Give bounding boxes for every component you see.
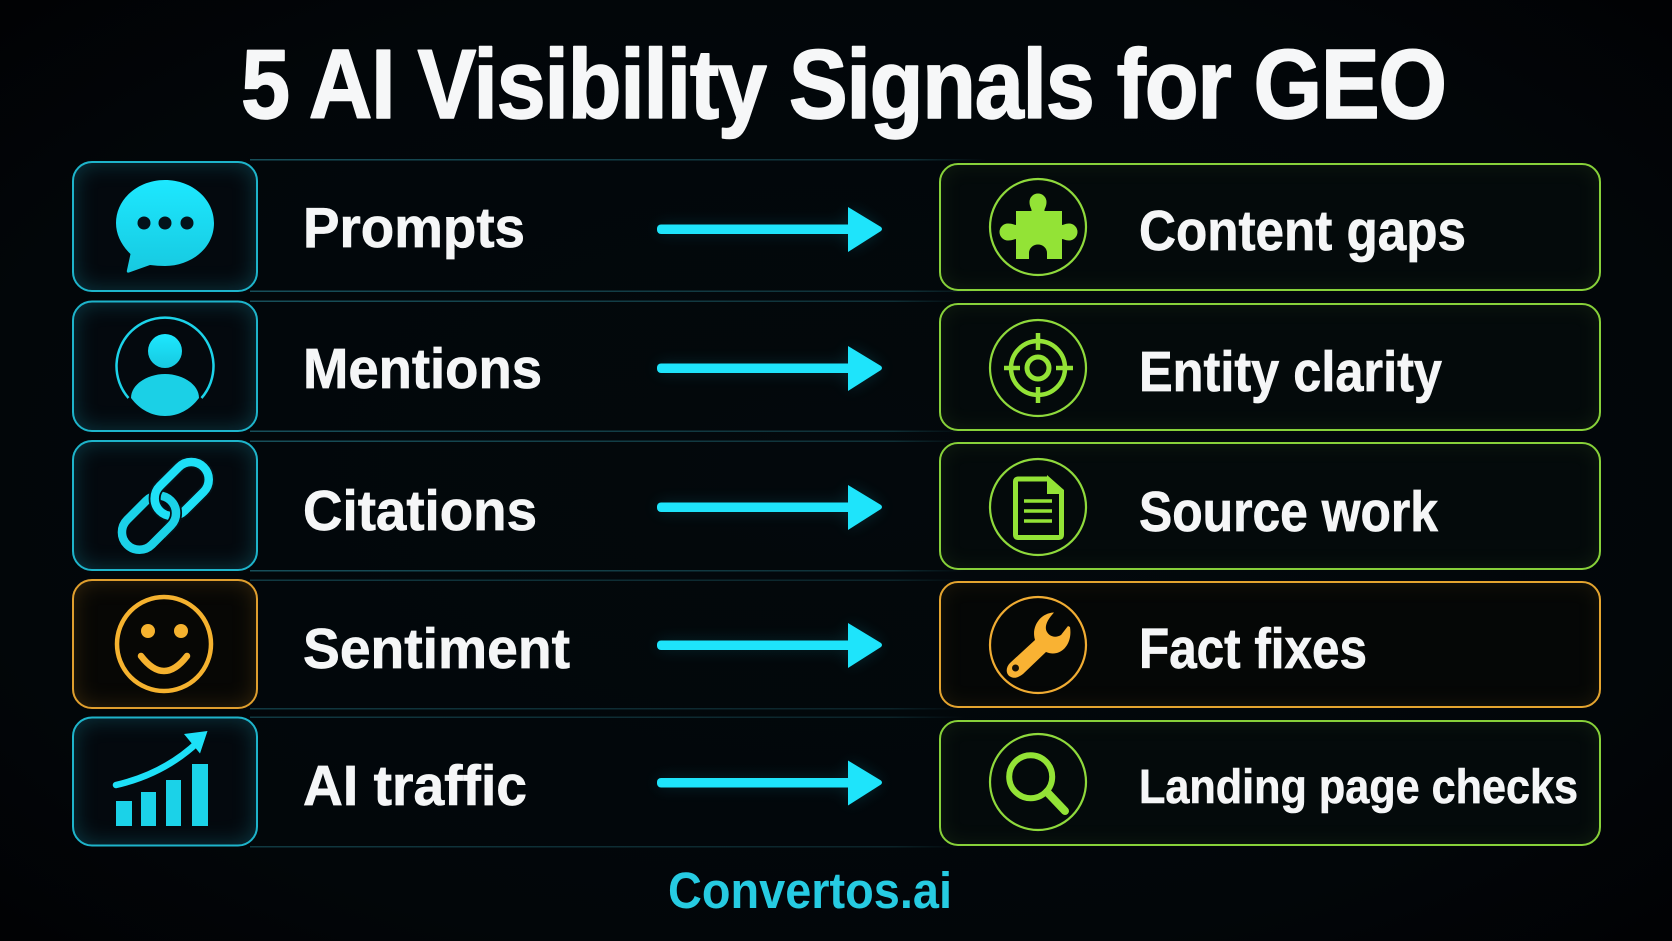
signal label: Citations: Citations bbox=[303, 479, 537, 543]
panel: Entity clarity action card bbox=[940, 304, 1600, 430]
panel: Sentiment signal card bbox=[73, 580, 257, 708]
panel: Source work action card bbox=[940, 443, 1600, 569]
action label: Landing page checks: Landing page checks bbox=[1139, 761, 1578, 814]
icon: speech bubble bbox=[116, 180, 214, 273]
icon: puzzle piece bbox=[990, 179, 1086, 275]
panel: row 4 background strip bbox=[250, 580, 965, 710]
panel: row 3 background strip bbox=[250, 440, 965, 572]
action label: Entity clarity: Entity clarity bbox=[1139, 340, 1442, 404]
arrow: Citations to Source work bbox=[657, 485, 882, 530]
panel: row 5 background strip bbox=[250, 716, 965, 848]
arrow: Prompts to Content gaps bbox=[657, 207, 882, 252]
icon: wrench bbox=[990, 597, 1086, 693]
arrow: AI traffic to Landing page checks bbox=[657, 760, 882, 806]
icon: target crosshair bbox=[990, 320, 1086, 416]
signal label: Prompts: Prompts bbox=[303, 196, 525, 260]
icon: smiley face bbox=[117, 597, 211, 691]
panel: Citations signal card bbox=[73, 441, 257, 570]
signal label: Mentions: Mentions bbox=[303, 337, 542, 401]
panel: Content gaps action card bbox=[940, 164, 1600, 290]
icon: magnifying glass bbox=[990, 734, 1086, 830]
action label: Source work: Source work bbox=[1139, 480, 1438, 544]
panel: Fact fixes action card bbox=[940, 582, 1600, 707]
footer brand: Convertos.ai: Convertos.ai bbox=[668, 862, 952, 919]
panel: AI traffic signal card bbox=[73, 718, 257, 846]
panel: row 1 background strip bbox=[250, 159, 985, 292]
arrow: Sentiment to Fact fixes bbox=[657, 623, 882, 668]
icon: person in circle bbox=[116, 318, 214, 416]
panel: Prompts signal card bbox=[73, 162, 257, 291]
icon: rising bar chart bbox=[116, 731, 208, 826]
panel: Landing page checks action card bbox=[940, 721, 1600, 845]
icon: chain link bbox=[115, 455, 216, 557]
action label: Content gaps: Content gaps bbox=[1139, 199, 1466, 263]
signal label: AI traffic: AI traffic bbox=[303, 754, 527, 818]
arrow: Mentions to Entity clarity bbox=[657, 346, 882, 391]
icon: document bbox=[990, 459, 1086, 555]
signal label: Sentiment: Sentiment bbox=[303, 617, 570, 681]
panel: row 2 background strip bbox=[250, 300, 965, 432]
action label: Fact fixes: Fact fixes bbox=[1139, 617, 1367, 681]
title: 5 AI Visibility Signals for GEO bbox=[241, 30, 1447, 139]
panel: Mentions signal card bbox=[73, 302, 257, 431]
